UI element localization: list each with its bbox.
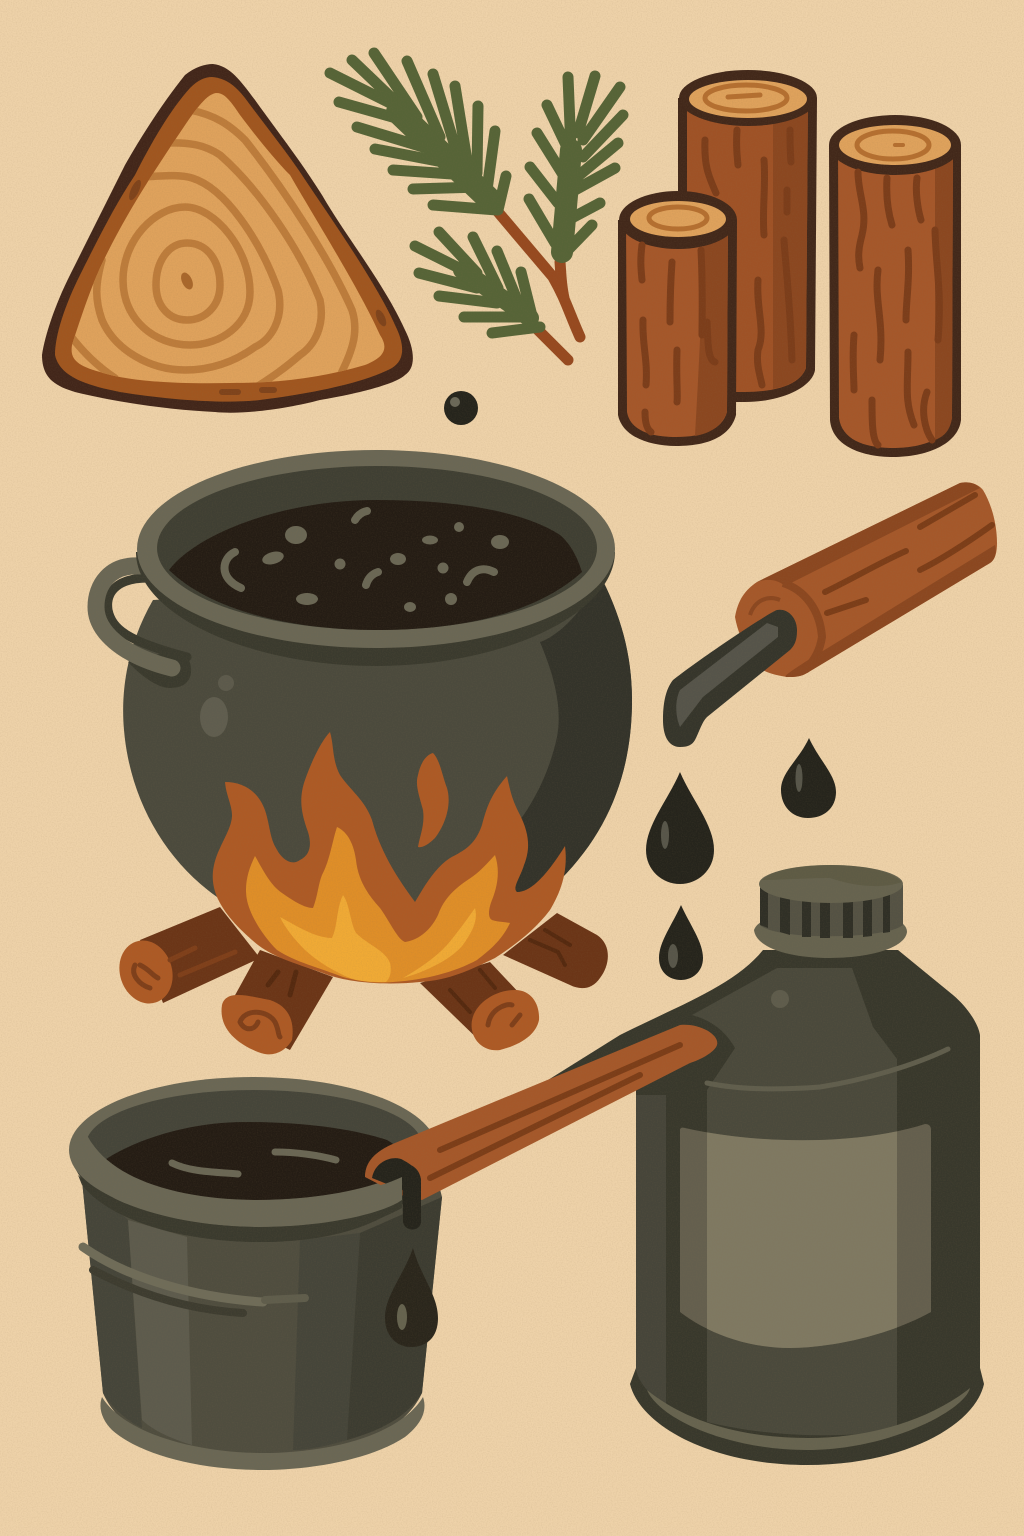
bucket rim bbox=[70, 1150, 437, 1242]
log: lower left bbox=[223, 950, 333, 1050]
bucket base bbox=[100, 1397, 424, 1470]
flame bbox=[213, 732, 566, 983]
icon: wood slice bbox=[42, 64, 413, 413]
icon: tar tap log bbox=[663, 482, 997, 747]
log: left bbox=[140, 907, 260, 1003]
log: back centre bbox=[678, 70, 817, 402]
cauldron shaded side bbox=[500, 575, 632, 920]
bottle base bbox=[647, 1388, 970, 1450]
log shaded edges bbox=[757, 482, 996, 677]
icon: log stack bbox=[618, 70, 961, 457]
cauldron rim bbox=[136, 552, 615, 666]
sprig stems bbox=[498, 212, 580, 360]
sprig needles bbox=[330, 53, 623, 333]
firewood bbox=[111, 907, 608, 1054]
icon: pine sprigs bbox=[330, 53, 623, 360]
tar drip bbox=[402, 1164, 421, 1230]
tar drop on bucket bbox=[385, 1248, 438, 1347]
stick bbox=[365, 1025, 717, 1200]
drop highlights bbox=[661, 764, 802, 968]
spout bbox=[663, 610, 797, 747]
stick opening bbox=[372, 1158, 420, 1190]
bottle body bbox=[548, 950, 984, 1465]
cauldron handle bbox=[96, 566, 191, 688]
bottle label bbox=[680, 1124, 931, 1348]
icon: tar bucket with stick bbox=[69, 1025, 717, 1470]
bucket body bbox=[80, 1150, 442, 1455]
icon: tar bottle bbox=[548, 865, 984, 1465]
icon: tar drops bbox=[646, 738, 836, 980]
bottle cap bbox=[760, 885, 903, 936]
bottle collar bbox=[754, 920, 907, 958]
log: front short bbox=[618, 191, 737, 446]
log: far right bbox=[503, 913, 608, 988]
tar bubbles bbox=[261, 522, 509, 612]
icon: cauldron over fire bbox=[96, 450, 632, 1054]
bucket tar bbox=[102, 1122, 405, 1200]
tar surface bbox=[169, 500, 582, 630]
log: right tall bbox=[829, 115, 961, 457]
bucket rim front bbox=[70, 1135, 402, 1227]
bucket hoop bbox=[93, 1270, 243, 1313]
cauldron body bbox=[123, 575, 632, 942]
log: lower right bbox=[420, 962, 538, 1048]
icon: small tar drop bbox=[444, 391, 478, 425]
log end ring bbox=[783, 583, 822, 670]
